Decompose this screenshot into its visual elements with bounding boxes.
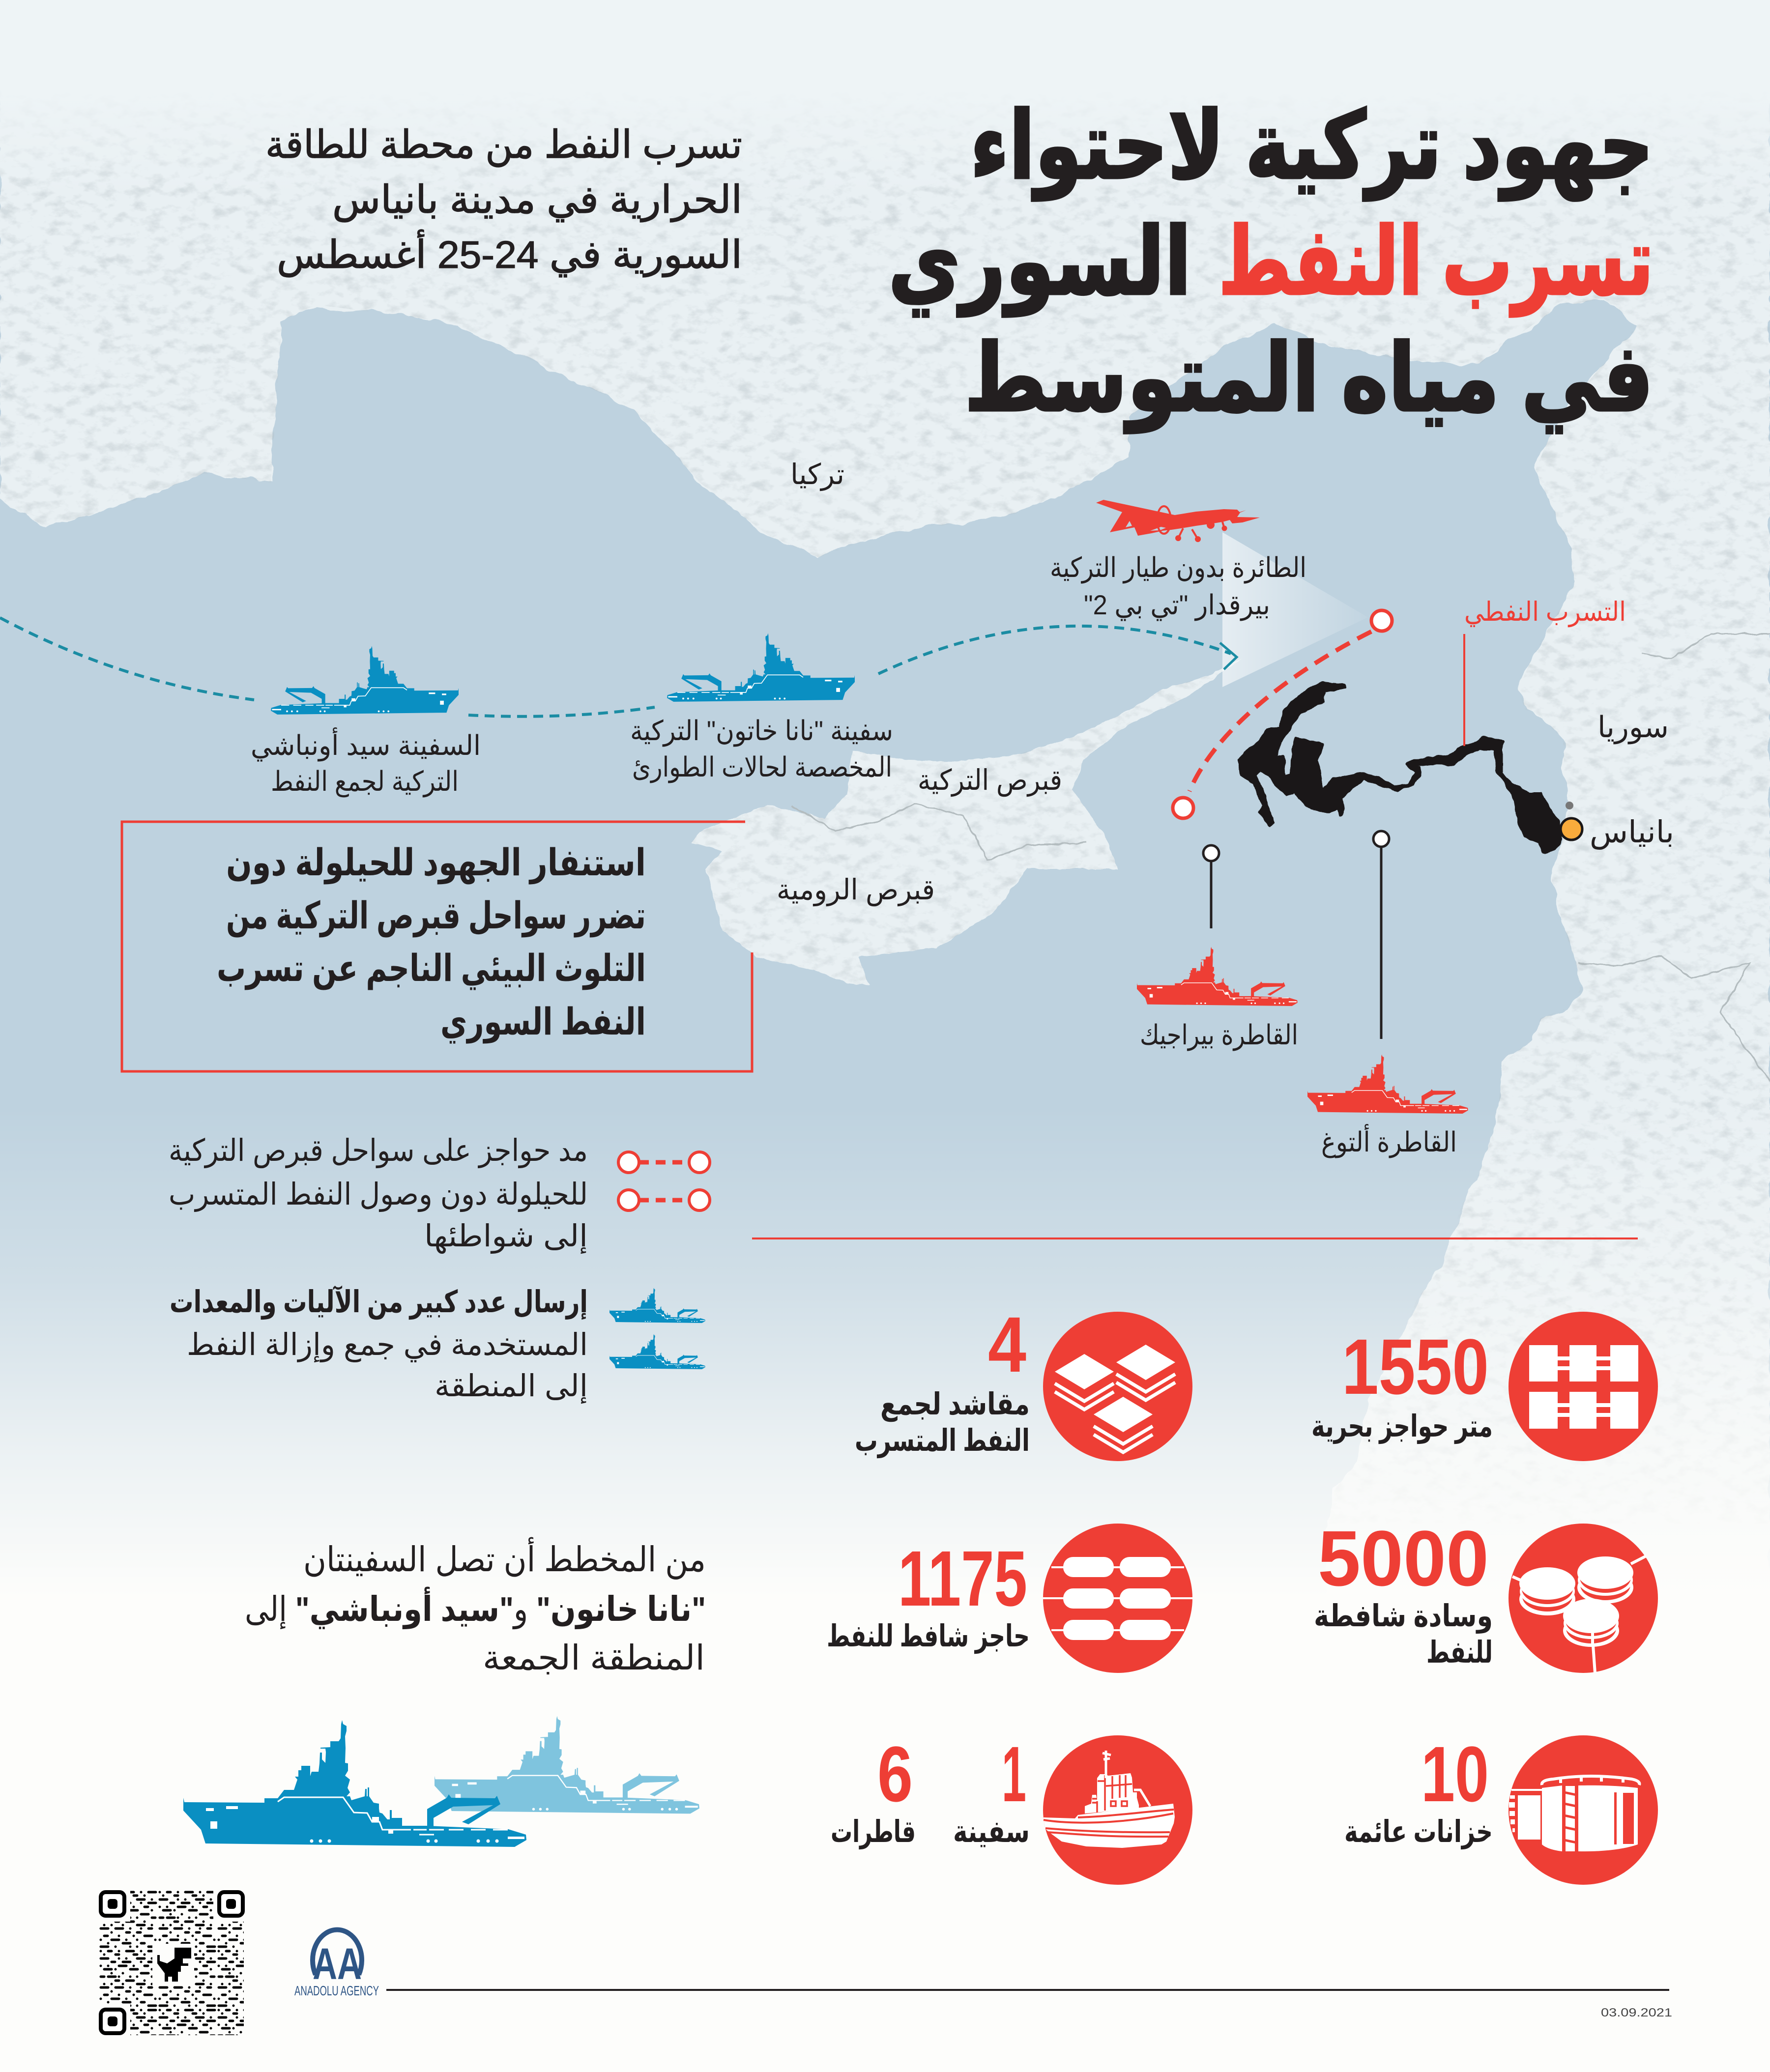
ship: Seyit Onbasi	[271, 646, 459, 715]
legend: barriers text: إلى شواطئها	[424, 1219, 588, 1254]
stat: 1175 absorbent barriers: 1175	[898, 1534, 1027, 1622]
stat: 1 ship, 6 tugs: قاطرات	[831, 1815, 916, 1849]
stat: 4 skimmers: 4	[988, 1300, 1026, 1388]
ship illustration: dark	[183, 1720, 526, 1847]
barrier dashed line	[1173, 610, 1392, 818]
legend: ships text: إرسال عدد كبير من الآليات والمعدات	[170, 1285, 588, 1320]
ship label: Nene Hatun: المخصصة لحالات الطوارئ	[632, 751, 892, 783]
stat: 1550 barriers	[1311, 1312, 1658, 1461]
date: 03.09.2021	[1601, 2006, 1672, 2019]
title: في مياه المتوسط	[964, 326, 1654, 433]
logo: Anadolu Agency: ANADOLU AGENCY	[294, 1983, 379, 1998]
arrival note: "نانا خانون" و"سيد أونباشي" إلى	[245, 1586, 706, 1630]
arrival note: المنطقة الجمعة	[483, 1639, 705, 1677]
icon: drone	[1096, 500, 1260, 542]
tug: Pirajik	[1137, 947, 1298, 1006]
stat: 1 ship, 6 tugs: 1	[1002, 1730, 1026, 1818]
stat: 1175 absorbent barriers	[827, 1524, 1192, 1673]
ship: Nene Hatun	[667, 633, 855, 702]
subtitle: السورية في 24-25 أغسطس	[277, 230, 742, 278]
stat: 1 ship, 6 tugs: سفينة	[953, 1815, 1030, 1849]
Banias marker: بانياس	[1590, 815, 1674, 850]
title: السوري	[888, 210, 1191, 317]
stat: 5000 pads: وسادة شافطة	[1314, 1599, 1493, 1634]
stat: 10 floating tanks	[1344, 1730, 1658, 1885]
map label: Turkish Cyprus: قبرص التركية	[918, 764, 1062, 797]
map label: Turkey: تركيا	[790, 459, 844, 491]
drone label: الطائرة بدون طيار التركية	[1050, 552, 1306, 584]
legend: barriers text	[169, 1134, 588, 1254]
legend: barriers text: مد حواجز على سواحل قبرص التركية	[169, 1134, 588, 1168]
arrow head	[1220, 643, 1237, 669]
stat: 4 skimmers	[855, 1300, 1192, 1461]
callout box: تضرر سواحل قبرص التركية من	[226, 895, 646, 938]
QR code	[96, 1887, 248, 2038]
subtitle: الحرارية في مدينة بانياس	[332, 178, 742, 223]
callout box	[122, 822, 752, 1071]
top fade overlay	[0, 0, 1770, 197]
section divider	[752, 1237, 1638, 1239]
stat: 1 ship, 6 tugs: 6	[877, 1730, 913, 1818]
callout box: النفط السوري	[440, 1001, 646, 1044]
drone label	[1050, 552, 1306, 621]
tug pin: Pirajik	[1203, 845, 1219, 928]
arrival note: من المخطط أن تصل السفينتان	[303, 1537, 706, 1580]
stat: 1550 barriers: متر حواجز بحرية	[1311, 1410, 1493, 1444]
oil spill	[1240, 684, 1561, 852]
ship illustration: light	[435, 1716, 699, 1813]
map label: Syria: سوريا	[1597, 711, 1669, 745]
stat: 1175 absorbent barriers: حاجز شافط للنفط	[827, 1619, 1030, 1654]
legend: ships text: إلى المنطقة	[435, 1369, 588, 1404]
stat: 1550 barriers: 1550	[1342, 1323, 1489, 1410]
logo: Anadolu Agency: AA	[313, 1940, 362, 1989]
logo: Anadolu Agency	[294, 1930, 379, 1998]
subtitle	[265, 123, 742, 278]
stat: 4 skimmers: مقاشد لجمع	[880, 1387, 1030, 1422]
callout box: التلوث البيئي الناجم عن تسرب	[217, 948, 646, 990]
legend: barriers text: للحيلولة دون وصول النفط المتسرب	[169, 1178, 588, 1212]
map label: Greek Cyprus: قبرص الرومية	[777, 874, 935, 907]
ship label: Seyit Onbasi: التركية لجمع النفط	[271, 766, 459, 798]
bottom fade overlay	[0, 1106, 1770, 1597]
legend: barriers icon	[618, 1152, 710, 1210]
arrival note	[245, 1537, 706, 1677]
callout box: استنفار الجهود للحيلولة دون	[226, 842, 646, 885]
ship label: Seyit Onbasi	[251, 727, 481, 798]
legend: ships icon	[609, 1288, 705, 1369]
stat: 5000 pads: للنفط	[1426, 1636, 1493, 1669]
drone label: بيرقدار "تي بي 2"	[1084, 589, 1270, 621]
footer line	[386, 1989, 1669, 1991]
ship label: Seyit Onbasi: السفينة سيد أونباشي	[251, 727, 481, 762]
tug: Altug	[1307, 1054, 1468, 1114]
tug label: Pirajik: القاطرة بيراجيك	[1140, 1019, 1298, 1051]
stat: 4 skimmers: النفط المتسرب	[855, 1424, 1030, 1458]
drone view beam	[1222, 532, 1368, 687]
tug pin: Altug	[1373, 831, 1389, 1039]
spill label: التسرب النفطي	[1464, 597, 1626, 627]
stat: 10 floating tanks: خزانات عائمة	[1344, 1815, 1493, 1849]
Banias marker	[1561, 802, 1674, 850]
stat: 5000 pads: 5000	[1318, 1514, 1489, 1602]
legend: ships text: المستخدمة في جمع وإزالة النفط	[187, 1328, 588, 1363]
ship label: Nene Hatun	[630, 715, 893, 783]
map: land masses	[0, 109, 1770, 1498]
subtitle: تسرب النفط من محطة للطاقة	[265, 123, 742, 168]
tug label: Altug: القاطرة ألتوغ	[1321, 1124, 1457, 1158]
ship label: Nene Hatun: سفينة "نانا خاتون" التركية	[630, 715, 893, 747]
stat: 10 floating tanks: 10	[1421, 1730, 1489, 1818]
title	[888, 94, 1654, 433]
legend: ships text	[170, 1285, 588, 1404]
stat: 5000 pads	[1314, 1514, 1658, 1673]
route: Seyit Onbasi	[0, 618, 1231, 717]
stat: 1 ship, 6 tugs	[831, 1730, 1192, 1885]
